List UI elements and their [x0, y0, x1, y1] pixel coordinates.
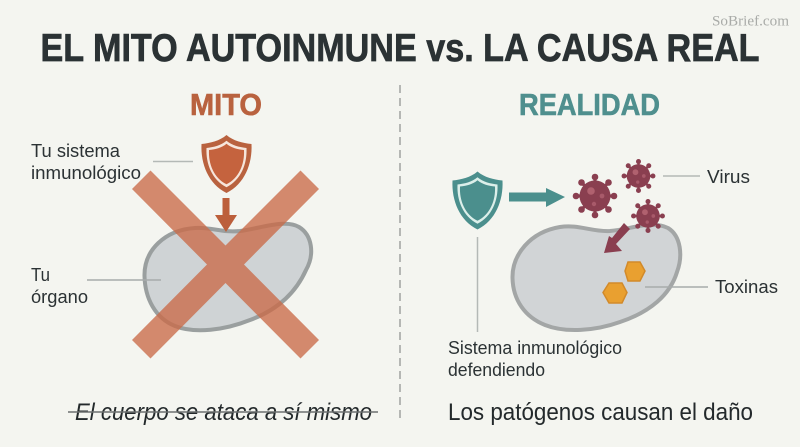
- label: virus: Virus: [707, 166, 750, 187]
- label: tu sistema inmunológico: inmunológico: [31, 162, 141, 183]
- icon: arrow down: [215, 198, 237, 232]
- caption: mito: El cuerpo se ataca a sí mismo: [75, 399, 372, 426]
- label: tu órgano: Tu: [31, 264, 50, 285]
- watermark: SoBrief.com: [712, 14, 790, 30]
- icon: toxin small: [625, 262, 645, 281]
- icon: virus top: [622, 159, 655, 193]
- icon: shield mito: [201, 135, 252, 193]
- label: tu órgano: órgano: [31, 286, 88, 307]
- arrow: virus into organ: [604, 223, 630, 253]
- organ with toxins: [512, 225, 680, 330]
- label: tu sistema inmunológico: Tu sistema: [31, 140, 121, 161]
- panel: mito: [31, 87, 378, 426]
- icon: virus large: [573, 174, 617, 218]
- heading: realidad: REALIDAD: [519, 87, 660, 122]
- label: sistema inmunológico defendiendo: Sistema inmunológico: [448, 337, 622, 358]
- big cross: [132, 170, 319, 358]
- caption: realidad: Los patógenos causan el daño: [448, 399, 753, 426]
- icon: shield realidad: [452, 172, 503, 230]
- panel: realidad: [448, 87, 778, 426]
- label: sistema inmunológico defendiendo: defendiendo: [448, 359, 545, 380]
- label: toxinas: Toxinas: [715, 276, 778, 297]
- icon: virus bottom: [631, 199, 665, 233]
- icon: toxin large: [603, 283, 627, 303]
- arrow: shield to virus: [509, 188, 565, 207]
- leader: tu órgano: [87, 279, 161, 281]
- organ: [144, 224, 311, 330]
- heading: mito: MITO: [190, 87, 262, 122]
- leader: sistema: [476, 237, 478, 332]
